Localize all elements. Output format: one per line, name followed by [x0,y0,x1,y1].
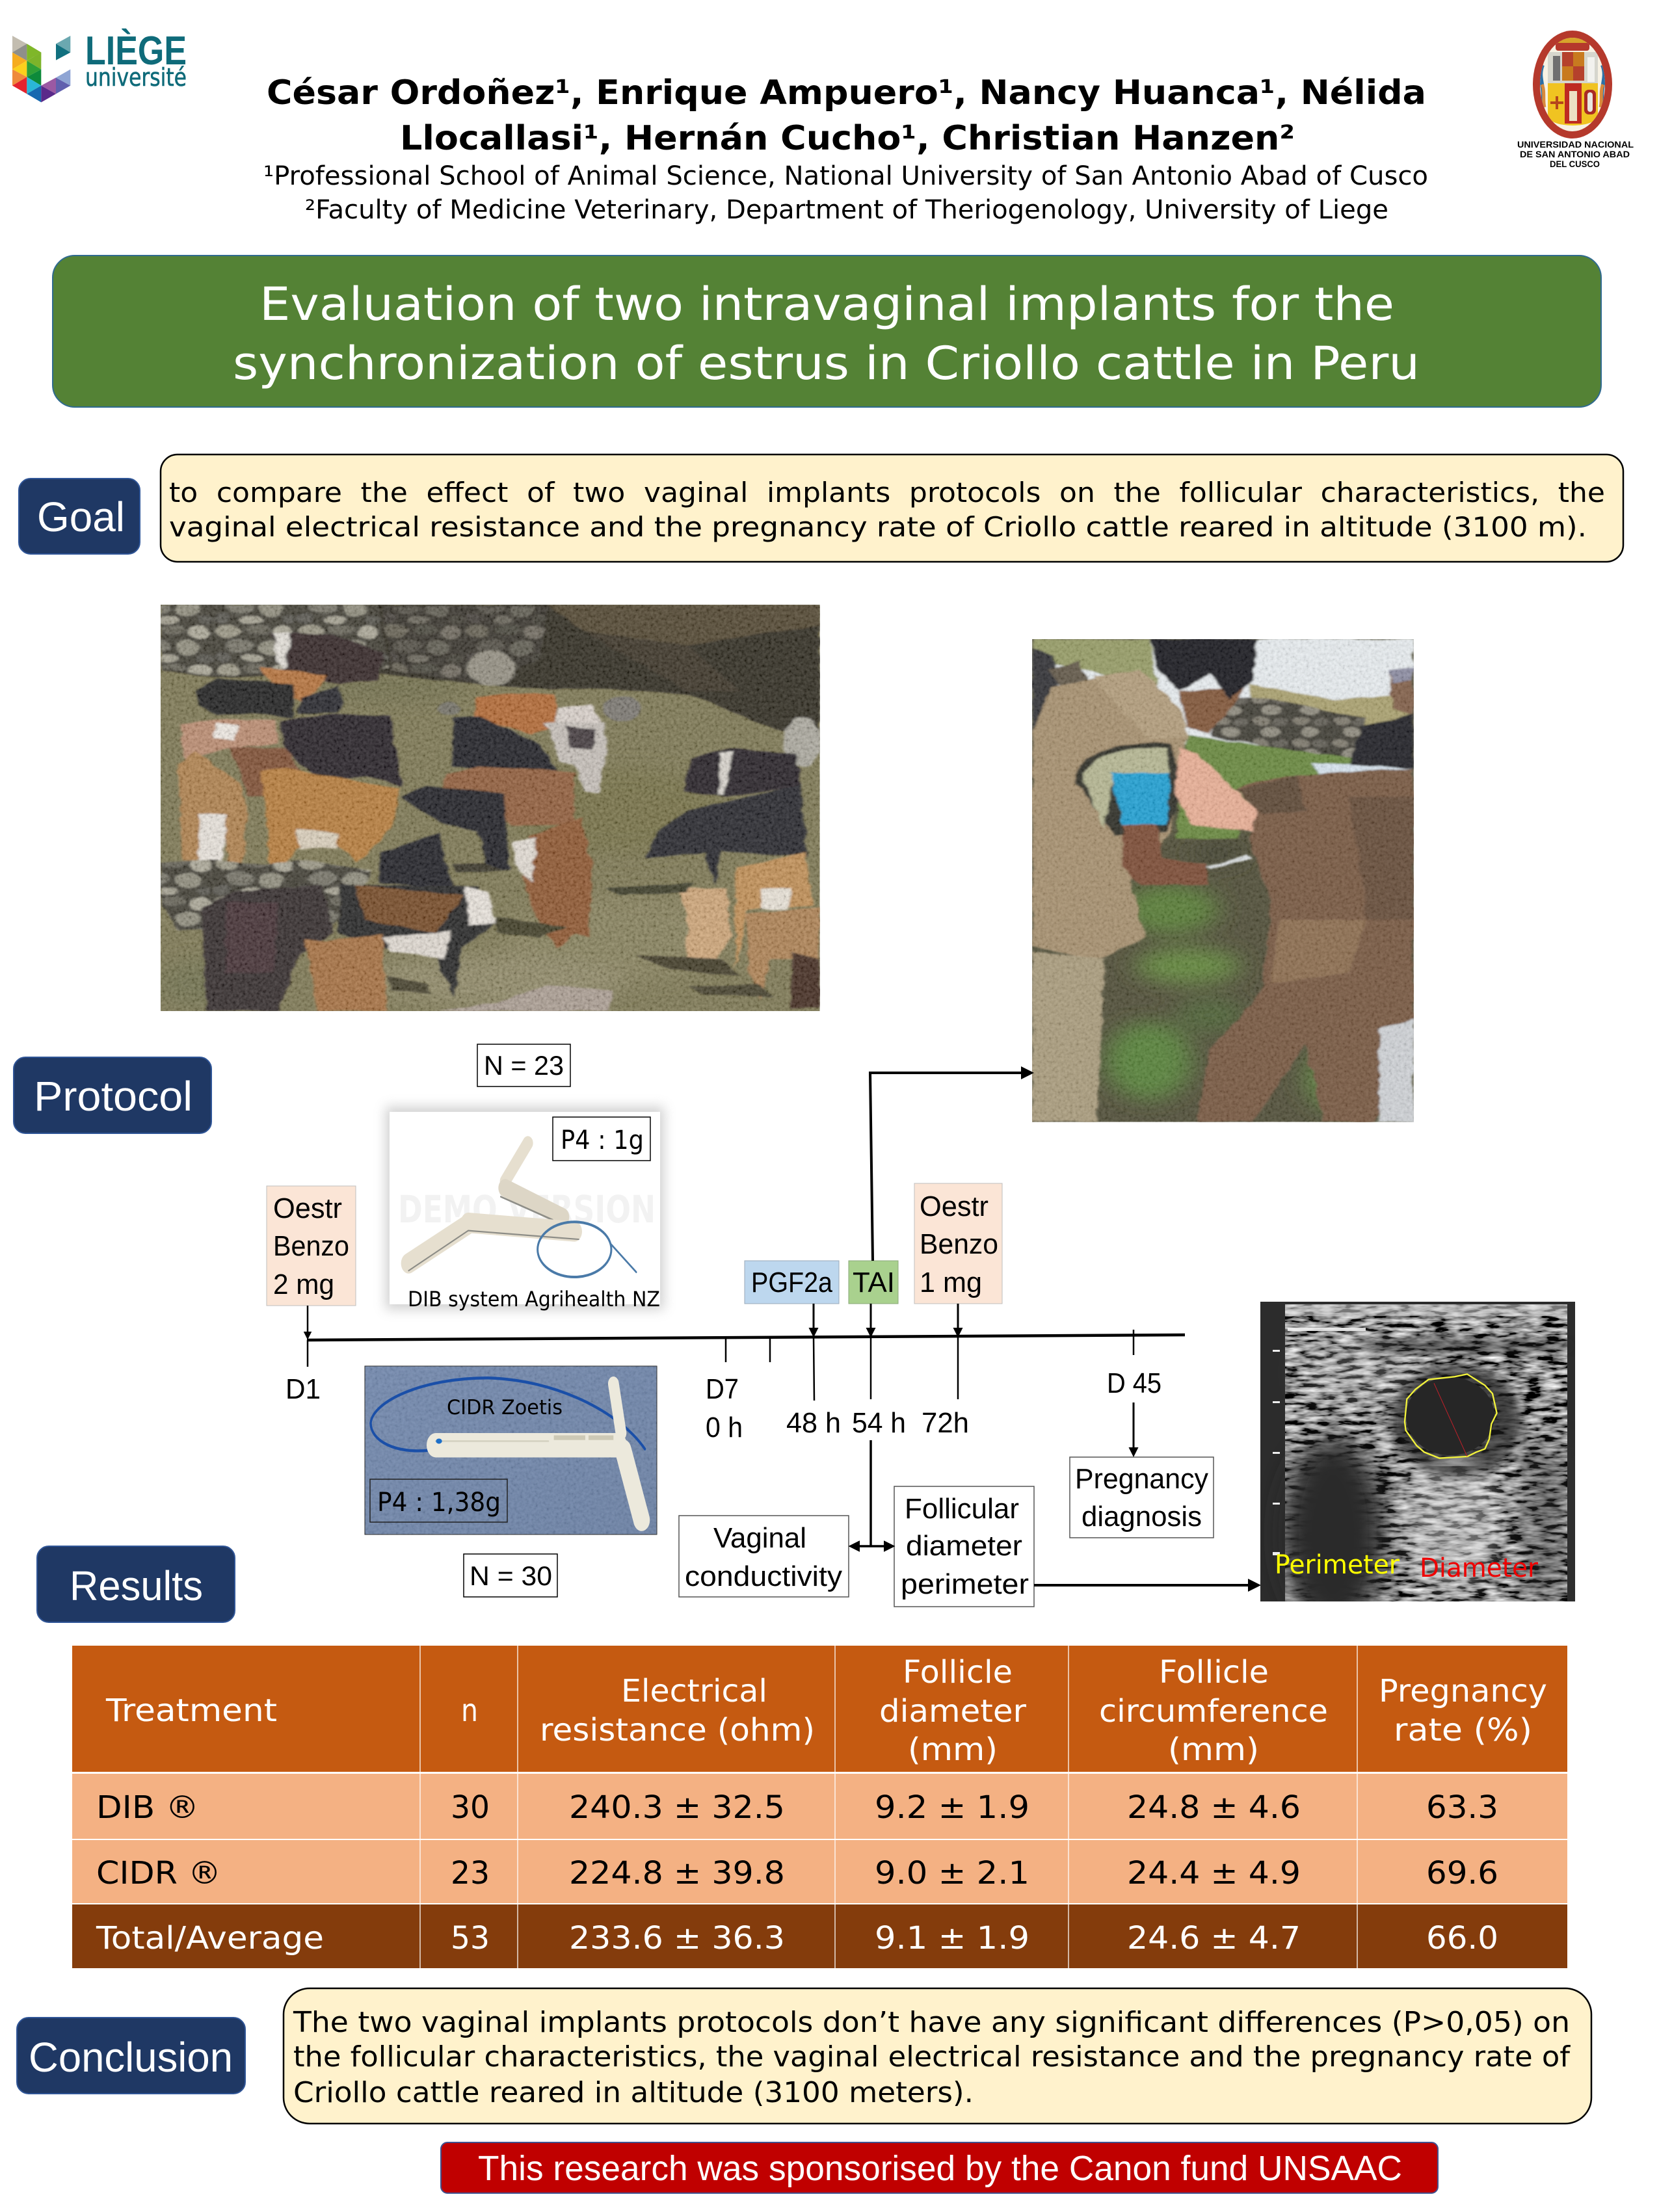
timeline labels: 48 h [786,1407,841,1439]
table header: Pregnancy [1379,1673,1547,1709]
section label: Protocol [14,1057,211,1133]
timeline with arrows and ticks [307,1304,1185,1401]
table row: total: 24.6 ± 4.7 [1127,1920,1301,1956]
timeline labels: 54 h [852,1407,906,1439]
title banner [53,256,1601,407]
affiliations [263,161,1428,225]
image: ultrasound [1260,1302,1575,1632]
photo: technician inserting implant [1032,639,1414,1122]
table header: resistance (ohm) [540,1712,815,1748]
arrow: TAI to photo [870,1073,1031,1261]
label: N = 30: N = 30 [470,1560,552,1591]
timeline labels: 0 h [706,1412,743,1443]
box: PGF2a: PGF2a [751,1267,832,1298]
label: P4 1,38g [370,1479,507,1522]
timeline labels: D1 [285,1373,321,1405]
table row: DIB: 63.3 [1426,1789,1498,1826]
table header: (mm) [1168,1731,1259,1768]
title banner: synchronization of estrus in Criollo cattle in Peru [233,337,1420,390]
label: Diameter: Diameter [1420,1553,1539,1583]
section label: Protocol: Protocol [34,1073,192,1120]
panel: conclusion text [284,1988,1591,2124]
authors [267,73,1426,158]
title banner: Evaluation of two intravaginal implants for the [259,278,1394,331]
timeline labels: 72h [922,1407,969,1439]
table row: CIDR [96,1855,1498,1891]
panel: conclusion text: The two vaginal implants protocols don’t have any significant differences (P>0,05) on [293,2006,1570,2039]
image: CIDR implant [365,1366,657,1534]
table row: total: 53 [451,1920,490,1956]
section label: Goal: Goal [37,494,125,540]
box: TAI: TAI [853,1267,895,1298]
box: vaginal conductivity: conductivity [685,1560,842,1592]
label: P4 1,38g: P4 : 1,38g [377,1488,501,1518]
box: Oestr Benzo 2 mg: 2 mg [273,1269,334,1300]
table row: total [96,1920,1498,1956]
table header: n [461,1692,478,1729]
box: TAI [849,1261,898,1304]
box: Oestr Benzo 2 mg: Benzo [273,1230,349,1262]
arrow: follicular to ultrasound [1034,1584,1258,1587]
arrow: 54h to measurements [851,1440,893,1546]
table header: Follicle [903,1654,1013,1691]
table header: Treatment [105,1692,277,1729]
table row: CIDR: 224.8 ± 39.8 [569,1855,785,1891]
follicle diameter line [1434,1383,1467,1456]
table row: CIDR: 9.0 ± 2.1 [875,1855,1029,1891]
seal caption: UNIVERSIDAD NACIONAL [1517,139,1634,150]
panel: goal text: vaginal electrical resistance and the pregnancy rate of Criollo cattle reared in altitude (3100 m). [169,511,1587,543]
timeline labels: D 45 [1107,1367,1161,1399]
timeline labels [285,1367,1161,1443]
section label: Conclusion [17,2018,245,2094]
table row: total: Total/Average [96,1920,324,1956]
label: N = 30 [464,1554,557,1597]
authors: César Ordoñez¹, Enrique Ampuero¹, Nancy Huanca¹, Nélida [267,73,1426,112]
table row: DIB: 240.3 ± 32.5 [569,1789,785,1826]
box: Oestr Benzo 2 mg: Oestr [273,1192,342,1224]
logo: Liège université: LIÈGE [85,29,187,73]
authors: Llocallasi¹, Hernán Cucho¹, Christian Hanzen² [400,119,1295,158]
sponsor banner: This research was sponsorised by the Canon fund UNSAAC [478,2149,1402,2188]
table row: CIDR: 23 [451,1855,490,1891]
table row: total: 66.0 [1426,1920,1498,1956]
table header: diameter [879,1693,1026,1730]
results table [72,1646,1567,1968]
box: vaginal conductivity: Vaginal [713,1522,806,1554]
section label: Conclusion: Conclusion [29,2034,233,2081]
caption: CIDR Zoetis: CIDR Zoetis [447,1396,563,1419]
image: DIB implant [386,1107,664,1311]
panel: goal text [161,454,1623,562]
box: vaginal conductivity [679,1516,849,1597]
box: Oestr Benzo 1 mg: Oestr [920,1191,989,1222]
logo: Liège université: université [85,63,187,92]
arrow: D45 to pregnancy diagnosis [1133,1402,1134,1455]
table header: Electrical [621,1673,767,1709]
panel: conclusion text: Criollo cattle reared in altitude (3100 meters). [293,2076,974,2109]
box: pregnancy diagnosis [1070,1457,1214,1538]
section label: Results [37,1546,235,1622]
seal caption: DEL CUSCO [1550,159,1600,169]
timeline labels: D7 [706,1373,739,1405]
seal caption: DE SAN ANTONIO ABAD [1520,149,1630,159]
image: DIB implant: DEMO VERSION [398,1187,656,1231]
table row: DIB: 24.8 ± 4.6 [1127,1789,1301,1826]
box: Oestr Benzo 2 mg [267,1186,356,1306]
table row: total: 233.6 ± 36.3 [569,1920,785,1956]
table row: total: 9.1 ± 1.9 [875,1920,1029,1956]
table row: CIDR: 24.4 ± 4.9 [1127,1855,1301,1891]
label: P4 1g: P4 : 1g [561,1126,644,1155]
photo: herd of Criollo cattle [156,605,821,1011]
label: N = 23: N = 23 [484,1050,564,1081]
caption: DIB system: DIB system Agrihealth NZ [408,1287,660,1311]
table header [105,1654,1547,1768]
table row: DIB [96,1789,1498,1826]
table row: DIB: 30 [451,1789,490,1826]
table header: rate (%) [1394,1712,1532,1748]
section label: Goal [19,479,140,554]
box: Oestr Benzo 1 mg: 1 mg [920,1267,982,1298]
box: Oestr Benzo 1 mg: Benzo [920,1228,998,1260]
table header: (mm) [908,1731,998,1768]
affiliations: ²Faculty of Medicine Veterinary, Department of Theriogenology, University of Liege [305,195,1388,225]
logo: Liège université [12,29,187,102]
box: PGF2a [745,1261,839,1304]
box: follicular diameter perimeter [894,1486,1034,1607]
seal caption [1517,139,1634,169]
table header: Follicle [1159,1654,1269,1691]
box: pregnancy diagnosis: diagnosis [1082,1501,1202,1533]
box: follicular diameter perimeter: Follicular [905,1493,1019,1525]
table header: circumference [1099,1693,1328,1730]
box: follicular diameter perimeter: perimeter [901,1568,1029,1600]
label: Perimeter: Perimeter [1275,1550,1400,1580]
table row: CIDR: CIDR ® [96,1855,221,1891]
box: Oestr Benzo 1 mg [914,1183,1002,1304]
table row: DIB: DIB ® [96,1789,199,1826]
table row: DIB: 9.2 ± 1.9 [875,1789,1029,1826]
box: pregnancy diagnosis: Pregnancy [1075,1463,1208,1495]
panel: goal text: to compare the effect of two vaginal implants protocols on the follicular characteristics, the [169,477,1605,508]
section label: Results: Results [70,1562,203,1609]
label: P4 1g [553,1117,650,1161]
box: follicular diameter perimeter: diameter [906,1530,1022,1562]
logo: university seal [1533,31,1612,138]
label: N = 23 [477,1044,570,1086]
panel: conclusion text: the follicular characteristics, the vaginal electrical resistance and the pregnancy rate of [293,2040,1571,2074]
follicle perimeter outline [1405,1374,1497,1458]
affiliations: ¹Professional School of Animal Science, National University of San Antonio Abad of Cusco [263,161,1428,191]
table row: CIDR: 69.6 [1426,1855,1498,1891]
